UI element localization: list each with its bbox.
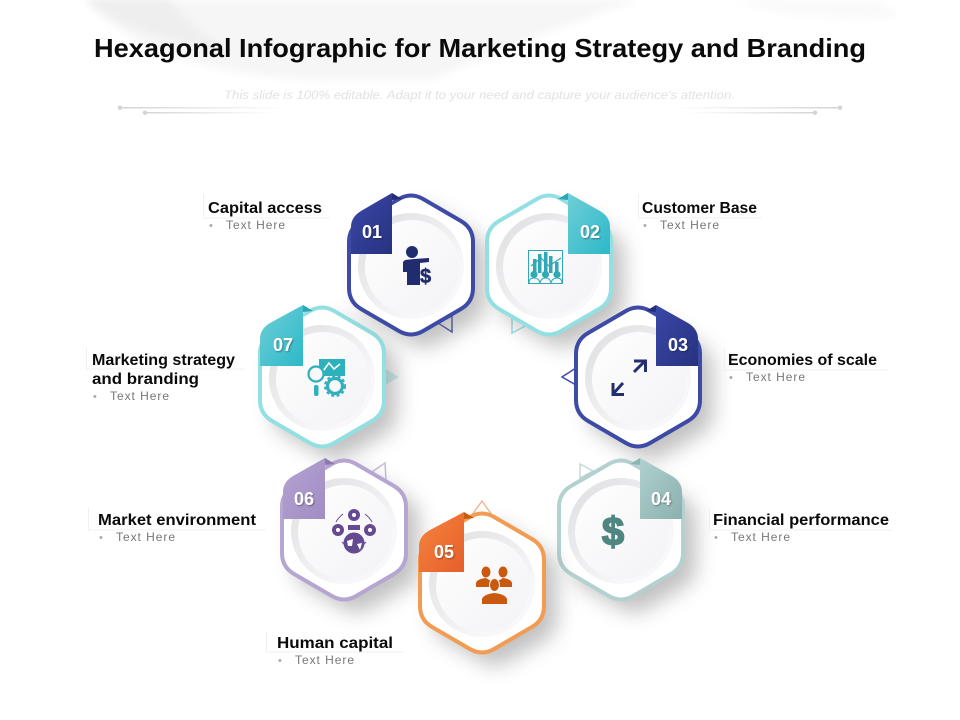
label: financial performance: Financial performance xyxy=(713,512,889,529)
pointer 03 xyxy=(562,368,576,385)
hexagon body 06 xyxy=(282,458,419,612)
icon: group of people xyxy=(476,566,512,604)
label: economies of scale xyxy=(724,348,888,384)
hexagon 02: customer base xyxy=(487,193,624,348)
label: marketing strategy and branding: Marketing strategy xyxy=(92,352,235,369)
hexagon body 01: 01 xyxy=(362,222,382,242)
hexagon body 05 xyxy=(419,512,557,666)
hexagon 04: financial performance xyxy=(559,458,696,612)
pointer 06 xyxy=(372,463,386,480)
label: marketing strategy and branding: and branding xyxy=(92,371,199,388)
label: capital access xyxy=(204,194,330,232)
label: economies of scale: Economies of scale xyxy=(728,352,877,369)
hexagon 05: human capital xyxy=(419,501,557,666)
label: human capital: Text Here xyxy=(295,653,354,667)
label: customer base: Customer Base xyxy=(642,200,757,217)
icon: expand arrows xyxy=(613,361,646,394)
icon: businessman with dollar xyxy=(403,246,431,288)
label: economies of scale: Text Here xyxy=(746,370,805,384)
hexagon 06: market environment xyxy=(282,458,419,612)
label: economies of scale: • xyxy=(729,372,733,384)
icon: chart with customers xyxy=(528,250,562,284)
hexagon body 06: 06 xyxy=(294,489,314,509)
label: marketing strategy and branding: Text Here xyxy=(110,389,169,403)
hexagon body 03 xyxy=(576,305,713,460)
decorative header rules xyxy=(118,106,842,115)
label: capital access: Capital access xyxy=(208,200,322,217)
label: human capital: • xyxy=(278,655,282,667)
hexagon body 04: 04 xyxy=(651,489,671,509)
hexagon 03: economies of scale xyxy=(562,305,713,460)
icon: analytics and gear xyxy=(308,359,345,396)
hexagon body 05: 05 xyxy=(434,542,454,562)
label: market environment xyxy=(88,508,266,544)
pointer 02 xyxy=(512,316,527,333)
label: marketing strategy and branding xyxy=(86,348,244,403)
hexagon body 03: 03 xyxy=(668,335,688,355)
label: market environment: Market environment xyxy=(98,512,256,529)
hexagon body 07 xyxy=(260,305,397,460)
hexagon 01: capital access xyxy=(349,193,486,348)
pointer 07 xyxy=(386,370,398,384)
hexagon body 07: 07 xyxy=(273,335,293,355)
label: capital access: • xyxy=(209,220,213,232)
hexagon 07: marketing strategy and branding xyxy=(260,305,398,460)
label: capital access: Text Here xyxy=(226,218,285,232)
label: market environment: Text Here xyxy=(116,530,175,544)
label: marketing strategy and branding: • xyxy=(93,391,97,403)
hexagon body 04 xyxy=(559,458,696,612)
label: financial performance: • xyxy=(714,532,718,544)
label: financial performance: Text Here xyxy=(731,530,790,544)
label: financial performance xyxy=(710,508,892,544)
title: Hexagonal Infographic for Marketing Strategy and Branding xyxy=(94,33,866,63)
icon: businessman with dollar: $ xyxy=(420,266,431,288)
label: customer base: Text Here xyxy=(660,218,719,232)
pointer 05 xyxy=(472,501,492,515)
subtitle: This slide is 100% editable. Adapt it to your need and capture your audience's attention. xyxy=(224,90,735,102)
label: customer base: • xyxy=(643,220,647,232)
pointer 01 xyxy=(438,316,452,332)
hexagon body 02 xyxy=(487,193,624,348)
pointer 04 xyxy=(580,464,593,478)
icon: dollar: $ xyxy=(602,510,624,554)
label: human capital xyxy=(266,632,404,667)
label: market environment: • xyxy=(99,532,103,544)
label: customer base xyxy=(638,194,762,232)
label: human capital: Human capital xyxy=(277,635,393,652)
icon: globe and people xyxy=(332,509,376,554)
hexagon body 02: 02 xyxy=(580,222,600,242)
hexagon body 01 xyxy=(349,193,486,348)
